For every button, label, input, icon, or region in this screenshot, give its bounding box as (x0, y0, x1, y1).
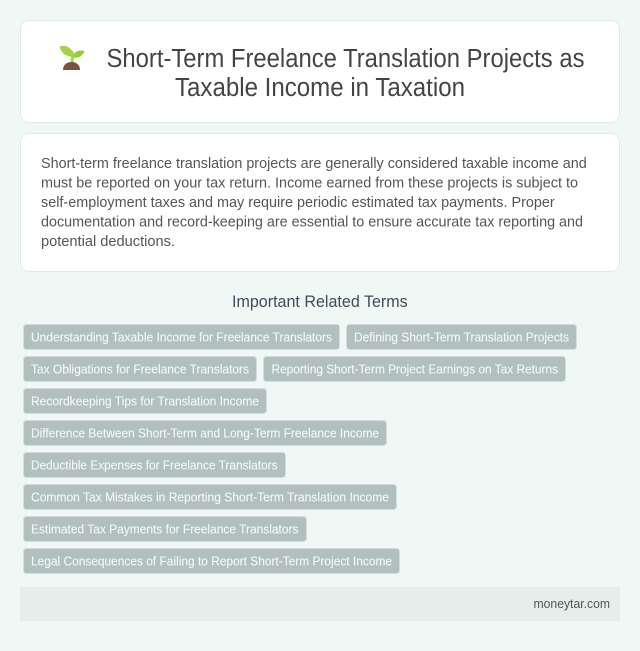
summary text (41, 155, 587, 250)
panel: summary card (20, 134, 620, 272)
tag: reporting earnings: Reporting Short-Term Project Earnings on Tax Returns (272, 362, 558, 376)
summary text: must be reported on your tax return. Income earned from these projects is subject to (41, 174, 578, 192)
footer (20, 587, 620, 621)
summary text: self-employment taxes and may require periodic estimated tax payments. Proper (41, 194, 555, 211)
tag: recordkeeping tips: Recordkeeping Tips for Translation Income (31, 394, 259, 408)
tag: tax obligations (24, 356, 256, 382)
tag: deductible expenses (24, 452, 286, 478)
tag: defining short-term projects: Defining Short-Term Translation Projects (354, 330, 569, 344)
summary text: documentation and record-keeping are essential to ensure accurate tax reporting and (41, 214, 583, 230)
summary text: Short-term freelance translation projects are generally considered taxable income and (41, 155, 587, 172)
icon: sprout (60, 46, 84, 70)
tag list (24, 324, 576, 574)
tag: recordkeeping tips (24, 388, 266, 414)
tag: estimated payments: Estimated Tax Payments for Freelance Translators (31, 522, 299, 536)
summary text: potential deductions. (41, 233, 175, 250)
tag: short vs long term: Difference Between Short-Term and Long-Term Freelance Income (31, 426, 379, 440)
heading: important related terms: Important Related Terms (232, 293, 408, 311)
tag: common mistakes (24, 484, 396, 510)
tag: understanding taxable income (24, 324, 340, 350)
tag: legal consequences: Legal Consequences of Failing to Report Short-Term Project Income (31, 554, 392, 568)
tag: common mistakes: Common Tax Mistakes in Reporting Short-Term Translation Income (31, 490, 389, 504)
footer: moneytar.com (534, 596, 610, 611)
tag: defining short-term projects (346, 324, 576, 350)
tag: deductible expenses: Deductible Expenses for Freelance Translators (31, 458, 278, 472)
tag: estimated payments (24, 516, 306, 542)
tag: legal consequences (24, 548, 400, 574)
title: Taxable Income in Taxation (175, 74, 465, 102)
panel: title card (20, 20, 620, 122)
tag: reporting earnings (264, 356, 566, 382)
tag: tax obligations: Tax Obligations for Freelance Translators (31, 362, 249, 376)
title (106, 45, 584, 102)
tag: understanding taxable income: Understanding Taxable Income for Freelance Translators (31, 330, 332, 344)
title: Short-Term Freelance Translation Projects as (106, 45, 584, 73)
tag: short vs long term (24, 420, 386, 446)
